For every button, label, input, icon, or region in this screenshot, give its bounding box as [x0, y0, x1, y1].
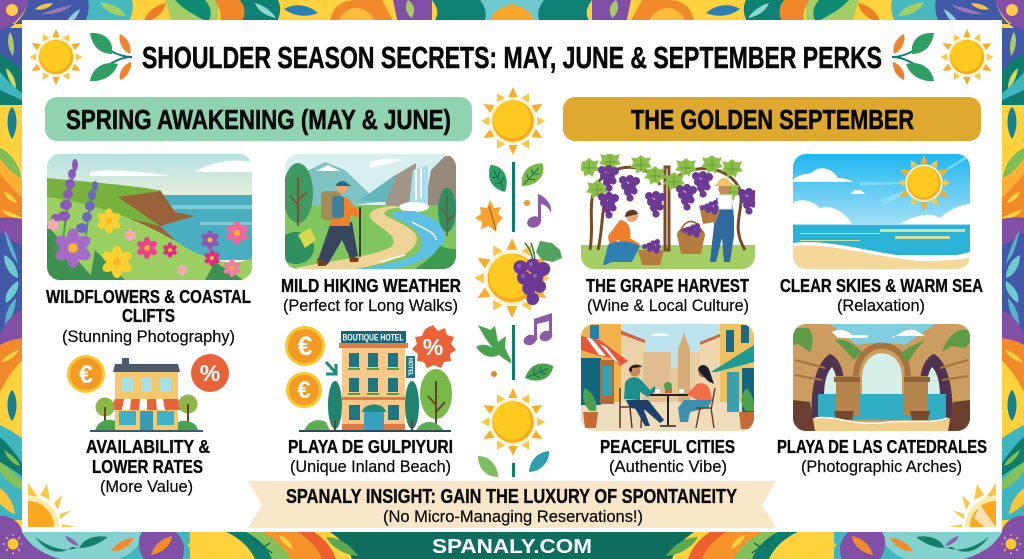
label: the grape harvest: THE GRAPE HARVEST [586, 276, 749, 296]
panel header: spring awakening [45, 97, 472, 141]
label: availability and lower rates: LOWER RATES [92, 457, 203, 477]
icon: corner sun bottom left [28, 483, 75, 527]
callout: spanaly insight banner: (No Micro-Managing Reservations!) [383, 507, 643, 526]
label: mild hiking weather: (Perfect for Long Walks) [283, 296, 458, 315]
label: availability and lower rates: (More Value) [100, 477, 193, 496]
label: peaceful cities: PEACEFUL CITIES [600, 437, 735, 457]
illustration: mild hiking weather [278, 154, 456, 269]
label: wildflowers and coastal cliffs: WILDFLOWERS & COASTAL [46, 287, 251, 307]
label: clear skies and warm sea [780, 276, 983, 315]
label: playa de gulpiyuri: (Unique Inland Beach) [290, 457, 451, 476]
illustration: boutique hotel: € [297, 331, 313, 361]
illustration: boutique hotel: € [297, 377, 311, 404]
icon: central bottom sun [481, 388, 545, 456]
illustration: the grape harvest [578, 152, 759, 269]
icon: music note upper [526, 194, 551, 230]
illustration: boutique hotel: BOUTIQUE HOTEL [342, 332, 404, 342]
label: mild hiking weather [281, 276, 461, 315]
label: playa de las catedrales: (Photographic Arches) [801, 457, 962, 476]
illustration: availability store: € [79, 361, 93, 389]
label: wildflowers and coastal cliffs: CLIFTS [122, 306, 175, 326]
icon: sun top left [29, 29, 83, 85]
icon: leaf branch top right [892, 33, 934, 81]
label: wildflowers and coastal cliffs [46, 287, 251, 346]
panel header: the golden september [563, 97, 981, 141]
illustration: availability store [67, 354, 229, 432]
icon: sun top right [940, 29, 994, 85]
callout: spanaly insight banner [248, 481, 776, 528]
panel header: the golden september: THE GOLDEN SEPTEMBER [631, 104, 914, 135]
illustration: boutique hotel: HOTEL [406, 358, 412, 376]
label: peaceful cities [600, 437, 735, 476]
label: playa de gulpiyuri [288, 437, 453, 476]
illustration: peaceful cities [581, 324, 754, 431]
illustration: wildflowers and coastal cliffs [47, 154, 252, 280]
icon: central sun with grapes [474, 238, 562, 318]
icon: corner sun bottom right [949, 483, 996, 527]
icon: leaf branch top left [90, 33, 132, 81]
label: clear skies and warm sea: (Relaxation) [837, 296, 925, 315]
panel header: spring awakening: SPRING AWAKENING (MAY & JUNE) [66, 104, 451, 135]
illustration: availability store: % [200, 360, 220, 386]
label: playa de gulpiyuri: PLAYA DE GULPIYURI [288, 437, 453, 457]
illustration: boutique hotel: % [423, 334, 443, 360]
label: availability and lower rates: AVAILABILITY & [86, 437, 210, 457]
icon: central top sun [481, 87, 545, 155]
footer website: SPANALY.COM [432, 536, 592, 558]
label: mild hiking weather: MILD HIKING WEATHER [281, 276, 461, 296]
icon: music note lower [522, 313, 554, 347]
illustration: boutique hotel [285, 325, 456, 432]
central divider with leaves and notes [475, 158, 546, 232]
label: availability and lower rates [86, 437, 210, 496]
label: clear skies and warm sea: CLEAR SKIES & WARM SEA [780, 276, 983, 296]
callout: spanaly insight banner: SPANALY INSIGHT: GAIN THE LUXURY OF SPONTANEITY [286, 486, 738, 508]
illustration: playa de las catedrales [793, 324, 970, 431]
label: the grape harvest [586, 276, 749, 315]
central bottom leaves [478, 451, 549, 477]
label: the grape harvest: (Wine & Local Culture) [587, 296, 749, 315]
label: peaceful cities: (Authentic Vibe) [609, 457, 727, 476]
central lower divider with leaves [476, 325, 556, 389]
label: playa de las catedrales [777, 437, 987, 476]
label: wildflowers and coastal cliffs: (Stunning Photography) [62, 327, 235, 346]
illustration: clear skies and warm sea [793, 150, 975, 269]
